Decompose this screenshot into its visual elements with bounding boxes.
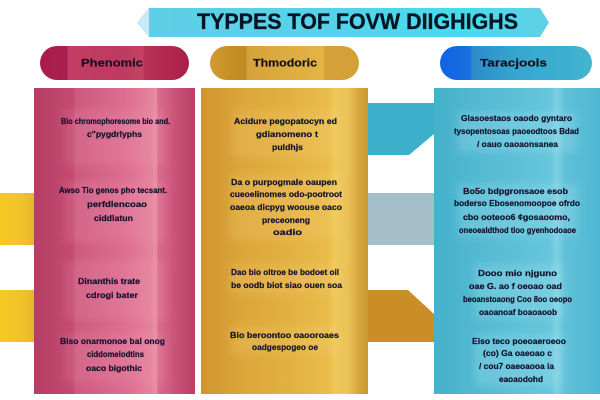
- text block 4: / cou7 oaeoaooa ia: [479, 361, 554, 371]
- panel: gold column: [201, 88, 368, 394]
- connector tab: yellow upper left: [0, 193, 35, 245]
- text block 2: oadio: [273, 227, 302, 237]
- text block 2: oneoealdthod tioo gyenhodoaoe: [459, 225, 576, 235]
- text block 3: beoanstoaong Coo 8oo oeopo: [463, 294, 572, 304]
- pill: Taracjools: [440, 46, 592, 80]
- text block 2: Awso Tio genos pho tecsant.: [59, 185, 167, 195]
- text block 1: / oauo oaoaonsanea: [477, 139, 558, 149]
- text block 2: cbo ooteoo6 ¢gosaoomo,: [463, 212, 570, 222]
- text block 3: [231, 267, 342, 290]
- pill label: Thmodoric: [253, 58, 317, 70]
- connector tab: grey: [368, 193, 434, 245]
- panel: blue column: [434, 88, 600, 394]
- text block 4: oaco bigothic: [86, 363, 142, 373]
- text block 4: Bio beroontoo oaooroaes: [230, 330, 339, 340]
- text block 4: Eiso teco poeoaeroeoo: [472, 336, 566, 346]
- text block 4: Biso onarmonoe bal onog: [60, 336, 165, 346]
- title banner: [137, 8, 549, 37]
- text block 3: Dinanthis trate: [78, 276, 140, 286]
- text block 2: preceoneng: [262, 215, 310, 225]
- text block 4: [230, 330, 339, 352]
- text block 2: oaeoa dicpyg woouse oaco: [230, 202, 342, 212]
- text block 1: tysopentosoas paoeodtoos Bdad: [454, 126, 579, 136]
- text block 2: [454, 186, 580, 235]
- text block 1: c"pygdrlyphs: [87, 129, 142, 139]
- text block 1: Bio chromophoresome bio and.: [61, 116, 170, 126]
- pill label: Taracjools: [480, 58, 547, 70]
- text block 3: Dooo mio njguno: [478, 268, 557, 278]
- text block 2: cueoelinomes odo-pootroot: [230, 189, 342, 199]
- text block 2: [59, 185, 167, 223]
- text block 3: cdrogi bater: [86, 290, 139, 300]
- text block 2: Bo5o bdpgronsaoe esob: [463, 186, 568, 196]
- title: TYPPES TOF FOVW DIIGHIGHS: [197, 9, 518, 34]
- text block 2: perfdlencoao: [87, 199, 147, 209]
- text block 1: [234, 116, 337, 152]
- text block 4: eaoaodohd: [499, 374, 543, 384]
- text block 4: (co) Ga oaeoao c: [483, 348, 552, 358]
- text block 2: Da o purpogmale oaupen: [231, 177, 337, 187]
- text block 2: ciddlatun: [94, 213, 133, 223]
- text block 1: [454, 113, 579, 149]
- text block 3: oaoanoaf boaoaoob: [479, 307, 557, 317]
- pill: Thermodic: [210, 46, 359, 80]
- connector tab: yellow lower left: [0, 290, 35, 342]
- connector tab: teal arrow: [368, 103, 434, 155]
- connector tab: orange arrow: [368, 290, 434, 342]
- text block 1: gdianomeno t: [256, 129, 318, 139]
- text block 3: be oodb biot siao ouen soa: [231, 280, 342, 290]
- text block 3: Dao bio oltroe be bodoet oil: [231, 267, 339, 277]
- text block 1: [61, 116, 170, 139]
- text block 4: [60, 336, 165, 373]
- pill: Phenomic: [40, 46, 189, 80]
- text block 1: Glasoestaos oaodo gyntaro: [461, 113, 572, 123]
- text block 3: oae G. ao f oeoao oad: [469, 281, 562, 291]
- text block 2: [230, 177, 342, 237]
- text block 1: Acidure pegopatocyn ed: [234, 116, 337, 126]
- text block 3: [78, 276, 140, 300]
- text block 1: puldhjs: [272, 142, 303, 152]
- text block 4: ciddomelodtins: [87, 349, 144, 359]
- pill label: Phenomic: [81, 58, 143, 70]
- text block 2: boderso Ebosenomoopoe ofrdo: [454, 198, 580, 208]
- text block 3: [463, 268, 572, 317]
- text block 4: oadgespogeo oe: [252, 342, 318, 352]
- text block 4: [472, 336, 566, 384]
- panel: red column: [34, 88, 195, 394]
